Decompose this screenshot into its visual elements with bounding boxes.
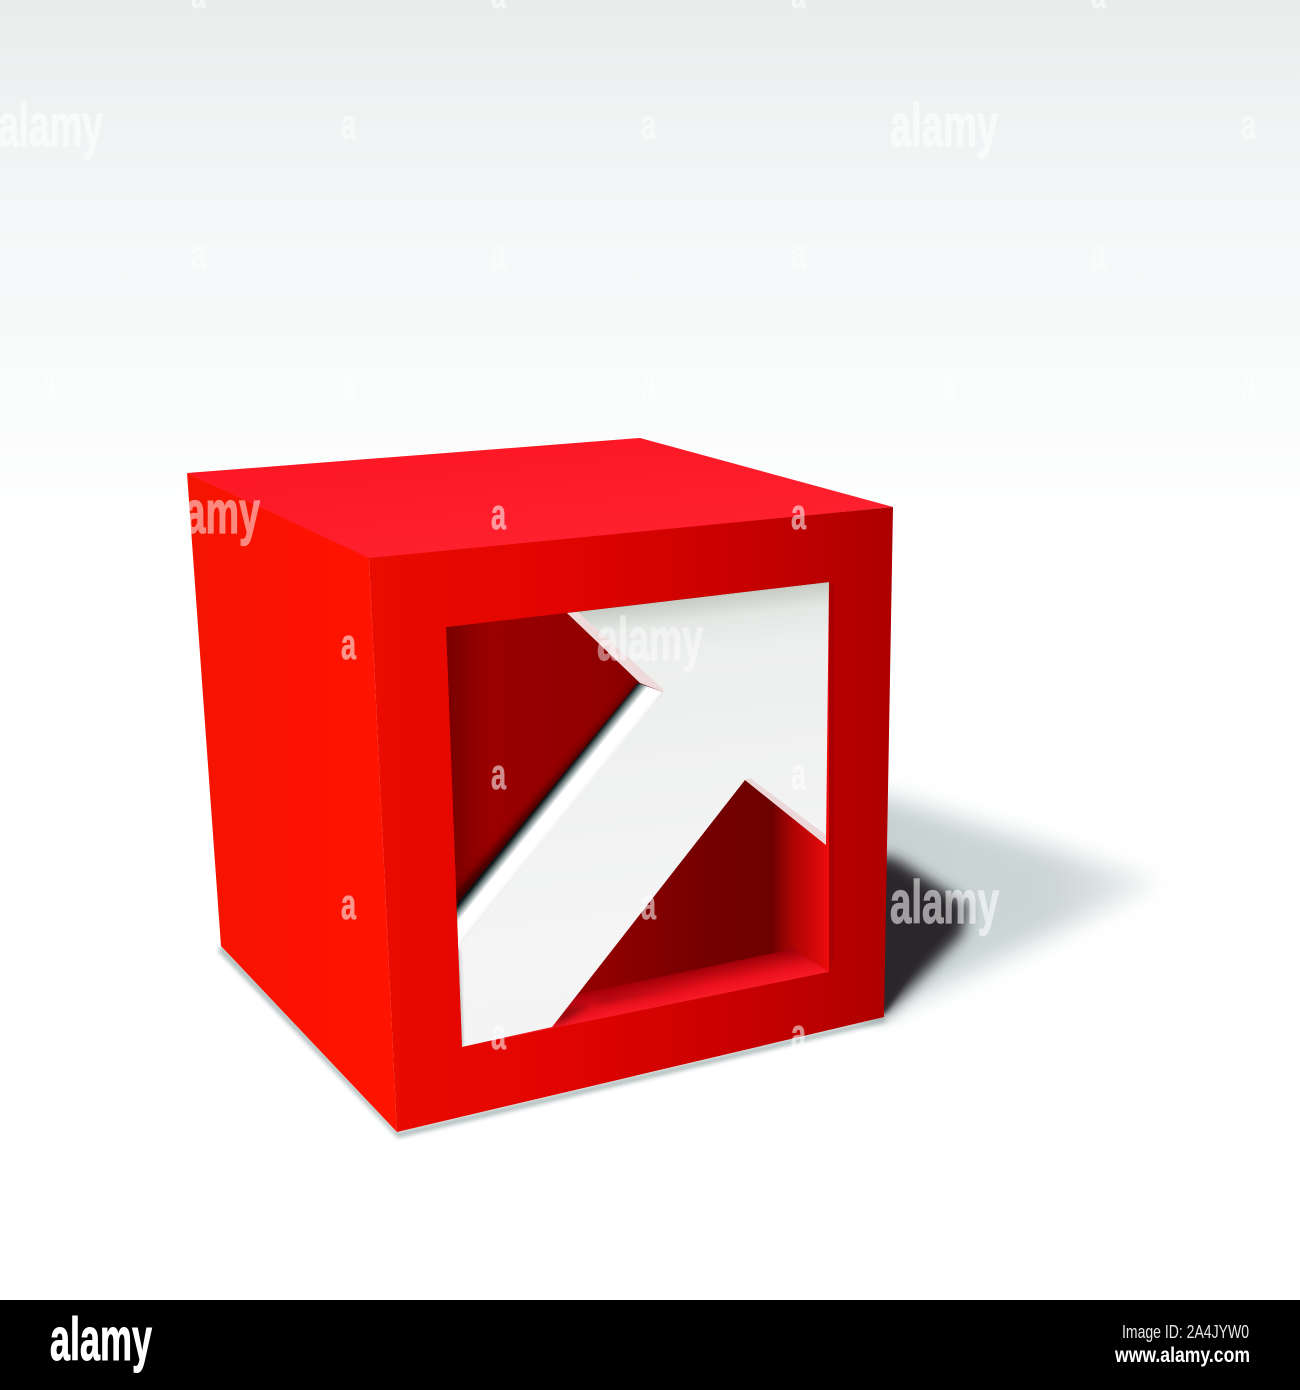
watermark: small letter grid: a (491, 230, 506, 279)
watermark: small letter grid: a (1241, 360, 1256, 409)
watermark: small letter grid: a (941, 360, 956, 409)
watermark: small letter grid: a (791, 230, 806, 279)
watermark: small letter grid: a (491, 490, 506, 539)
watermark: small letter grid: a (341, 100, 356, 149)
watermarks (0, 0, 1256, 1059)
cube front face (369, 507, 893, 1132)
watermark: small letter grid: a (641, 100, 656, 149)
arrow shaft bevel (456, 683, 663, 948)
watermark: small letter grid: a (341, 360, 356, 409)
watermark: small letter grid: a (791, 1010, 806, 1059)
recessed window (446, 582, 829, 1047)
watermark: small letter grid: a (491, 1010, 506, 1059)
watermark: alamy top right: alamy (890, 92, 998, 159)
footer url: www.alamy.com (1114, 1344, 1250, 1367)
watermark: small letter grid (41, 0, 1256, 1059)
watermark: small letter grid: a (341, 620, 356, 669)
watermark: small letter grid: a (191, 230, 206, 279)
watermark: alamy on arrow: alamy (597, 606, 703, 673)
arrow head lower bevel (745, 778, 826, 845)
watermark: small letter grid: a (1241, 100, 1256, 149)
watermark: small letter grid: a (341, 880, 356, 929)
watermark: small letter grid: a (791, 490, 806, 539)
arrow tail edge shading (456, 950, 463, 1047)
footer bar (0, 1300, 1300, 1390)
watermark: small letter grid: a (641, 360, 656, 409)
window right edge reveal (829, 582, 834, 972)
cube top face (187, 438, 893, 559)
arrow head upper bevel (567, 612, 663, 692)
footer image id: Image ID: 2A4JYW0 (1122, 1322, 1249, 1342)
window floor (462, 949, 829, 1047)
watermark: small letter grid: a (641, 880, 656, 929)
watermark: alamy top left: alamy (0, 92, 103, 159)
cast shadow (218, 790, 1160, 1138)
watermark: alamy on cube left: alamy (153, 479, 260, 546)
watermark: small letter grid: a (791, 750, 806, 799)
cube left face (187, 473, 397, 1132)
watermark: small letter grid: a (1091, 230, 1106, 279)
window right wall (772, 582, 829, 972)
watermark: small letter grid: a (491, 750, 506, 799)
white arrow (456, 582, 829, 1047)
arrow shadow on back wall (450, 680, 665, 945)
arrow body (458, 582, 829, 1047)
footer logo: alamy (50, 1306, 152, 1373)
watermark: alamy on shadow: alamy (890, 869, 999, 936)
watermark: small letter grid: a (41, 360, 56, 409)
window back wall (446, 582, 829, 1047)
red cube (187, 438, 893, 1132)
